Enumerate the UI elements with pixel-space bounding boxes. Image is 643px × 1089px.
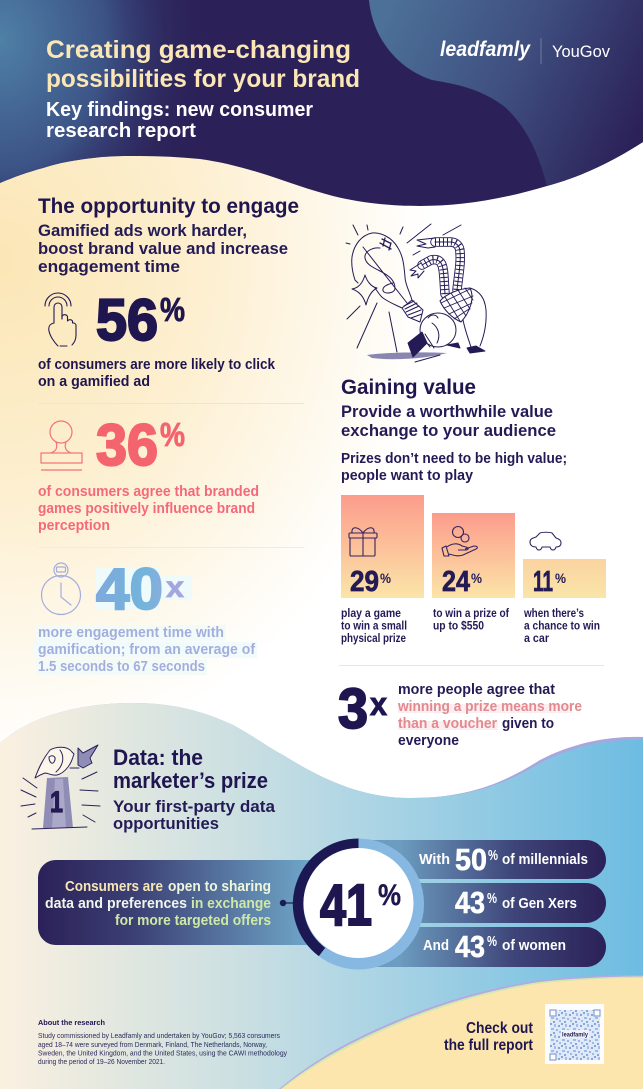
intro text: gamified ads: engagement time — [38, 257, 180, 276]
text: 36% description: of consumers agree that branded — [38, 484, 259, 500]
call to action: check out the full report: the full report — [444, 1037, 533, 1054]
subheading: value exchange: Provide a worthwhile value — [341, 402, 553, 421]
QR code: leadfamly — [562, 1032, 588, 1038]
text: 40x description: more engagement time with — [38, 625, 224, 641]
panel: consumers open to sharing data: Consumers are — [65, 879, 163, 895]
subheading: first-party data opportunities — [113, 797, 276, 833]
bar labels: up to $550 — [433, 618, 484, 632]
panel: audience pills — [358, 840, 606, 967]
bar: 11% chance to win a car: 11 — [533, 566, 553, 598]
bar: 29% physical prize: % — [380, 570, 391, 586]
illustration: man bowing to a giant lightbulb — [346, 224, 486, 362]
text: about the research: Study commissioned by Leadfamly and undertaken by YouGov; 5,563 consumers — [38, 1031, 280, 1040]
subheading: first-party data opportunities: opportunities — [113, 814, 219, 833]
top-right blob — [369, 0, 643, 186]
heading: data the marketer's prize — [113, 745, 268, 793]
stat: 36%: % — [160, 416, 185, 453]
subheading: first-party data opportunities: Your first-party data — [113, 797, 276, 816]
pill: 50% of millennials — [358, 840, 606, 879]
text: 56% description: of consumers are more likely to click — [38, 357, 276, 373]
logos: leadfamly and YouGov: YouGov — [552, 42, 610, 61]
bar labels: a car — [524, 631, 549, 645]
stat: 3x: 3 — [338, 677, 368, 741]
bar: 11% chance to win a car — [523, 532, 606, 598]
call to action: check out the full report: Check out — [466, 1020, 533, 1037]
text: 3x description: winning a prize means more — [397, 698, 582, 715]
bar: 29% physical prize — [341, 495, 424, 598]
pill: 43% of women — [358, 927, 606, 967]
text: 36% description: games positively influence brand — [38, 501, 255, 517]
QR code — [545, 1004, 604, 1064]
heading: data the marketer's prize: Data: the — [113, 745, 203, 770]
text: 36% description — [38, 484, 259, 534]
heading: the opportunity to engage: The opportunity to engage — [38, 195, 299, 218]
intro text: gamified ads — [38, 221, 288, 276]
stat: 56%: % — [160, 291, 185, 328]
pill: 50% of millennials: With — [419, 851, 450, 868]
bar: 24% prize up to $550: % — [471, 570, 482, 586]
text: 40x description: gamification; from an average of — [38, 642, 255, 658]
text: prizes don't need to be high value: people want to play — [341, 467, 474, 484]
subtitle — [46, 99, 313, 142]
logos: leadfamly and YouGov — [440, 38, 610, 64]
text: about the research: Sweden, the United Kingdom, and the United States, using the CAWI methodology — [38, 1048, 287, 1058]
bar labels — [341, 606, 600, 645]
text: 3x description: more people agree that — [398, 681, 555, 698]
bar: 24% prize up to $550 — [432, 513, 515, 598]
text: prizes don't need to be high value: Prizes don’t need to be high value; — [341, 450, 567, 467]
stat: 56%: 56 — [96, 288, 158, 353]
footer: yellow corner wave — [279, 975, 643, 1089]
stat: 40x — [96, 557, 192, 622]
text: 56% description: on a gamified ad — [38, 374, 150, 390]
connector dot — [280, 900, 296, 906]
panel: consumers open to sharing data: in exchange — [191, 896, 271, 912]
panel: consumers open to sharing data: for more targeted offers — [115, 913, 271, 929]
pill: 43% of Gen Xers: 43 — [455, 885, 485, 920]
donut chart: 41% — [293, 838, 424, 970]
bar: 29% physical prize: 29 — [350, 566, 379, 598]
pill: 50% of millennials: % — [488, 847, 498, 864]
text: 3x description: given to — [502, 715, 554, 732]
donut chart: 41%: 41 — [320, 873, 372, 938]
pill: 43% of women: of women — [502, 937, 566, 954]
panel: consumers open to sharing data: open to sharing — [168, 879, 271, 895]
intro text: gamified ads: boost brand value and increase — [38, 239, 288, 258]
pill: 43% of Gen Xers: of Gen Xers — [502, 895, 577, 912]
lower section: blue wave background — [0, 703, 643, 1089]
bar labels: when there’s — [523, 606, 584, 620]
text: 3x description: everyone — [398, 732, 459, 749]
bar: 11% chance to win a car: % — [555, 570, 566, 586]
text: about the research — [38, 1018, 287, 1066]
logos: leadfamly and YouGov: leadfamly — [440, 38, 531, 61]
panel: consumers open to sharing data — [38, 860, 320, 945]
pill: 43% of Gen Xers — [358, 883, 606, 923]
intro text: gamified ads: Gamified ads work harder, — [38, 221, 247, 240]
pill: 43% of women: And — [423, 937, 449, 954]
illustration: bird on podium number one — [21, 745, 100, 829]
text: 3x description — [397, 681, 582, 749]
subtitle: Key findings: new consumer — [46, 99, 313, 121]
bar labels: to win a small — [341, 618, 407, 632]
pill: 43% of women: 43 — [455, 929, 485, 964]
stat: 36%: 36 — [96, 413, 158, 478]
subheading: value exchange: exchange to your audience — [341, 421, 556, 440]
pill: 50% of millennials: of millennials — [502, 851, 588, 868]
text: about the research: About the research — [38, 1018, 105, 1027]
text: about the research: during the period of 19–26 November 2021. — [38, 1057, 165, 1066]
icon: stamp — [41, 421, 82, 470]
pill: 43% of women: % — [487, 933, 497, 950]
bar labels: a chance to win — [524, 618, 600, 632]
illustration: bird on podium number one: 1 — [50, 786, 63, 819]
title: Creating game-changing — [46, 36, 351, 64]
title — [46, 36, 360, 93]
call to action: check out the full report — [444, 1020, 533, 1054]
stat: 3x — [338, 677, 387, 741]
heading: gaining value: Gaining value — [341, 376, 476, 399]
text: prizes don't need to be high value — [341, 450, 567, 484]
donut chart: 41%: % — [378, 879, 401, 912]
text: 40x description: 1.5 seconds to 67 seconds — [38, 659, 205, 675]
pill: 50% of millennials: 50 — [455, 842, 487, 877]
subtitle: research report — [46, 120, 196, 142]
pill: 43% of Gen Xers: % — [487, 890, 497, 907]
text: 3x description: than a voucher — [398, 715, 497, 732]
text: about the research: aged 18–74 were surveyed from Denmark, Finland, The Netherlands, Norway, — [38, 1040, 267, 1049]
bar chart: prize preferences — [341, 495, 606, 598]
header band: navy wave — [0, 0, 643, 206]
stat: 40x: 40 — [96, 557, 163, 622]
text: 56% description — [38, 357, 276, 390]
bar labels: to win a prize of — [433, 606, 510, 620]
icon: stopwatch — [42, 563, 80, 614]
bar labels: play a game — [341, 606, 401, 620]
text: 36% description: perception — [38, 518, 110, 534]
title: possibilities for your brand — [46, 65, 360, 93]
bar labels: physical prize — [341, 631, 406, 645]
subheading: value exchange — [341, 402, 556, 440]
stat: 3x: x — [370, 686, 387, 722]
heading: data the marketer's prize: marketer’s prize — [113, 768, 268, 793]
stat: 40x: x — [166, 571, 184, 604]
bar: 24% prize up to $550: 24 — [442, 566, 470, 598]
icon: tapping hand — [45, 293, 76, 346]
panel: consumers open to sharing data: data and preferences — [45, 896, 187, 912]
text: 40x description — [33, 625, 257, 675]
